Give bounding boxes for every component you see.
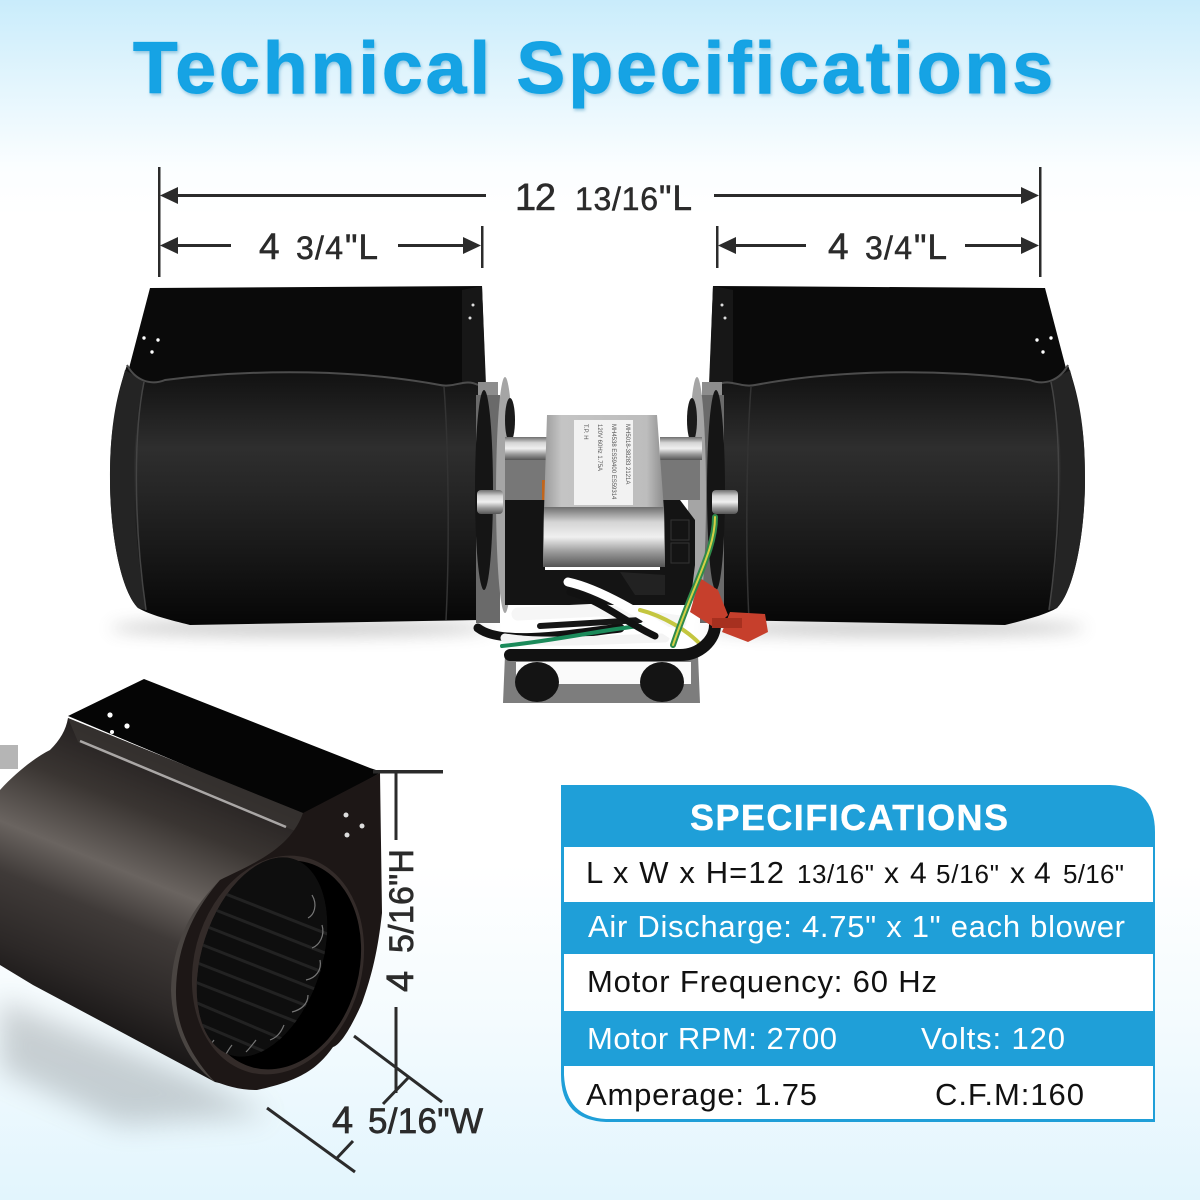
title: Technical Specifications (133, 28, 1053, 109)
motor label: T.P. H (582, 424, 588, 440)
motor shafts (505, 437, 702, 505)
black motor base (505, 500, 695, 605)
green and yellow wire (673, 517, 715, 645)
right mounting plate (687, 377, 738, 623)
dimension: overall length: 12 (515, 177, 556, 219)
row: dimensions: 5/16" (1063, 859, 1124, 889)
front band (171, 880, 235, 1082)
row: dimensions (564, 847, 1153, 902)
motor metal cover (543, 415, 665, 567)
dimension: right blower length: "L (914, 228, 947, 267)
dimension: overall length (158, 167, 1042, 277)
dimension: right blower length: 3/4 (865, 230, 912, 266)
top lip (68, 718, 303, 833)
left blower housing (110, 286, 490, 636)
row: dimensions: 5/16" (936, 859, 999, 889)
row: dimensions: 4 (910, 857, 927, 890)
lower-left blower shadow (0, 1000, 270, 1125)
front plate (176, 773, 382, 1090)
dimension: overall length: "L (659, 179, 692, 218)
blower opening (168, 836, 388, 1094)
motor assembly (475, 377, 768, 703)
motor label (574, 420, 633, 505)
dimension: right blower length: 4 (828, 226, 849, 267)
row: amperage and cfm: C.F.M:160 (935, 1077, 1084, 1112)
row: motor rpm and volts: Motor RPM: 2700 (587, 1021, 837, 1056)
row: dimensions: x (1010, 857, 1025, 890)
dimension: width (267, 1036, 483, 1172)
dimension: left blower length: 3/4 (296, 230, 343, 266)
row: dimensions: L x W x H=12 (586, 855, 784, 890)
dimension: overall length: 13/16 (575, 181, 658, 217)
fan blades (196, 857, 327, 1056)
dimension: right blower length (716, 226, 1039, 268)
row: air discharge: Air Discharge: 4.75" x 1" each blower (588, 909, 1125, 944)
specifications table (561, 785, 1155, 1122)
dimension: left blower length (160, 226, 484, 268)
lower-left blower photo (0, 679, 388, 1094)
row: dimensions: 4 (1034, 857, 1051, 890)
motor label: MH5018-38283 2121A (624, 424, 630, 484)
dimension: height (373, 770, 443, 1093)
mounting bracket and feet (503, 655, 700, 703)
table frame (561, 785, 1155, 1122)
right blower housing (705, 286, 1085, 636)
row: motor frequency (564, 954, 1153, 1011)
wire bundle (478, 582, 715, 655)
table header: SPECIFICATIONS (690, 797, 1008, 838)
blower outlet box (68, 679, 382, 815)
motor label: 120V 60Hz 1.75A (596, 424, 602, 471)
red connectors (690, 578, 768, 642)
row: amperage and cfm (564, 1066, 1153, 1119)
dimension: width: 5/16"W (368, 1102, 483, 1141)
motor label: MH4538 ES59400 ES59314 (610, 424, 616, 500)
row: motor frequency: Motor Frequency: 60 Hz (587, 964, 937, 999)
row: motor rpm and volts (587, 1021, 1065, 1056)
left mounting plate (475, 377, 515, 623)
row: dimensions: x (884, 857, 899, 890)
dimension: left blower length: 4 (259, 226, 280, 267)
dimension: height: 5/16"H (383, 849, 421, 953)
dimension: height: 4 (380, 971, 422, 992)
row: amperage and cfm: Amperage: 1.75 (586, 1077, 817, 1112)
row: motor rpm and volts: Volts: 120 (921, 1021, 1065, 1056)
dimension: left blower length: "L (345, 228, 378, 267)
cylinder body (0, 718, 303, 1088)
motor stub (0, 745, 18, 769)
dimension: width: 4 (332, 1100, 353, 1142)
row: dimensions: 13/16" (797, 859, 874, 889)
